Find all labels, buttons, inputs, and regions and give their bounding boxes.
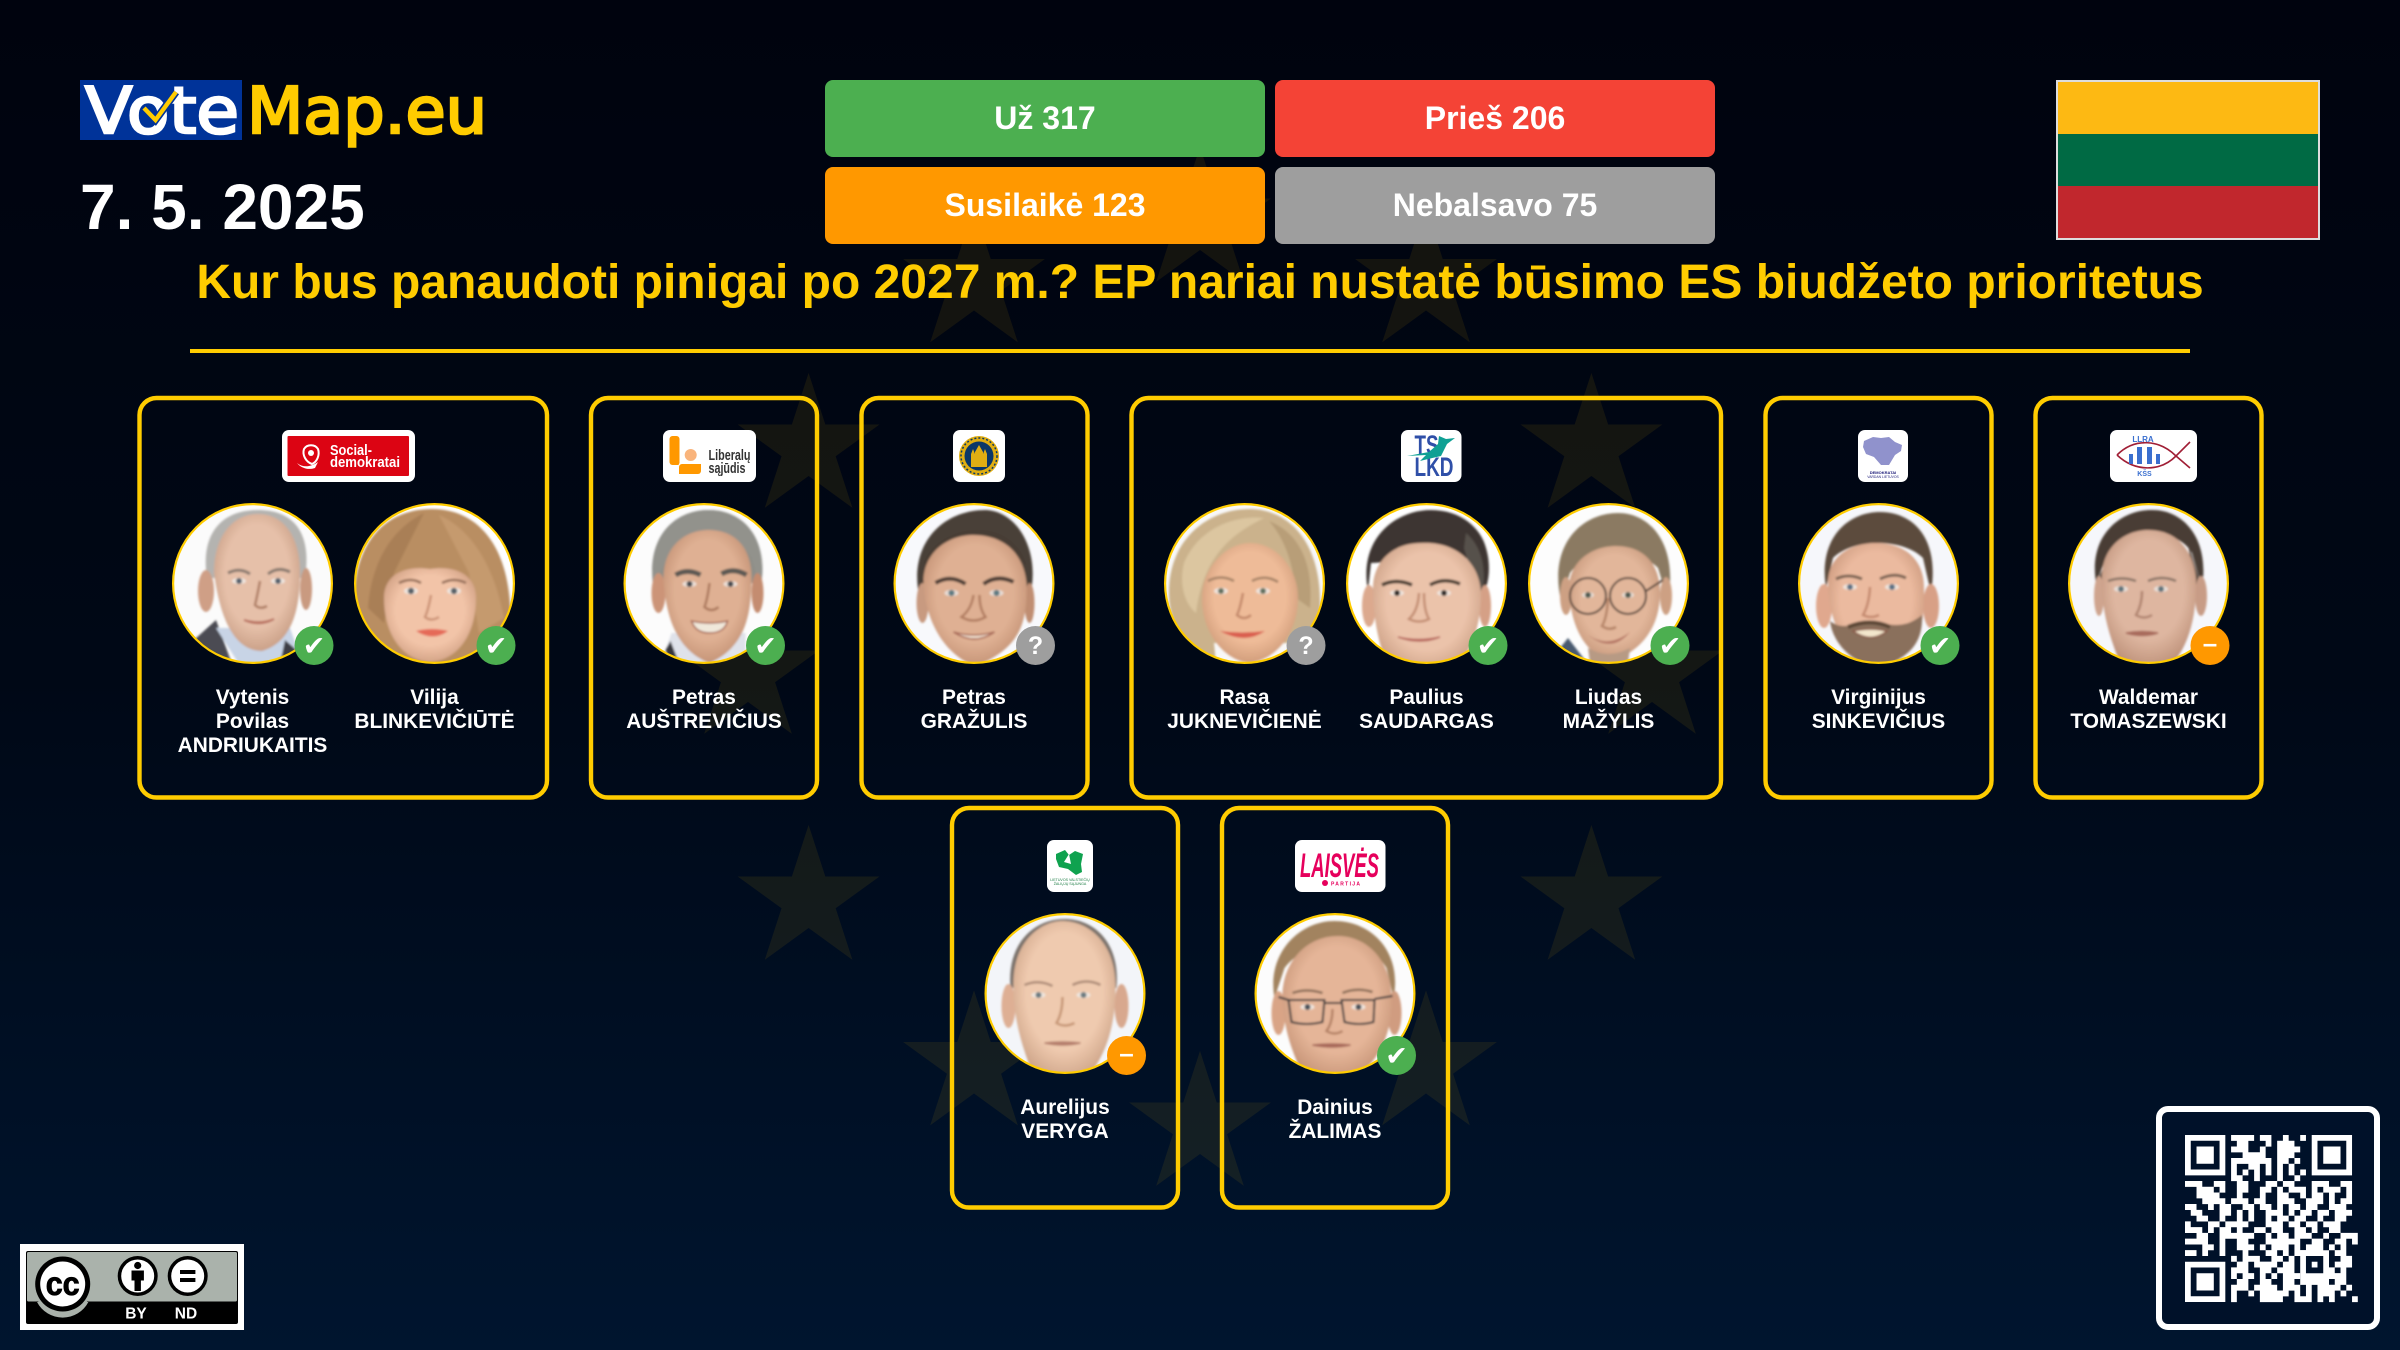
- vote tally buttons: [825, 80, 1715, 244]
- photo: Petras Auštrevičius: [624, 504, 784, 664]
- photo: Virginijus Sinkevičius: [1798, 504, 1958, 668]
- photo: Aurelijus Veryga: [985, 914, 1145, 1078]
- photo: Waldemar Tomaszewski: [2068, 504, 2228, 664]
- party logo: LLRA-KŠS: [2110, 430, 2197, 482]
- name: JUKNEVIČIENĖ: [1167, 709, 1322, 733]
- badge: for: ✔: [1385, 1041, 1408, 1072]
- badge: for: ✔: [1929, 631, 1951, 662]
- party logo: TS-LKD: [1401, 430, 1462, 482]
- name: AUŠTREVIČIUS: [626, 709, 782, 733]
- name: Povilas: [216, 710, 289, 733]
- party logo: Lietuvos valstiečių: [1047, 840, 1093, 892]
- name: BLINKEVIČIŪTĖ: [354, 709, 515, 733]
- badge: for: [1468, 626, 1508, 665]
- badge: for: [476, 626, 516, 665]
- panel: Gražulis party: [862, 398, 1088, 798]
- name: Vytenis: [216, 686, 289, 709]
- badge: abstain: [1107, 1036, 1146, 1075]
- party logo: Demokratai vardan Lietuvos: VARDAN LIETUVOS: [1867, 475, 1900, 479]
- badge: not voted: [1016, 626, 1055, 665]
- party logo: TS-LKD: LKD: [1414, 452, 1454, 482]
- button: did not vote: [1275, 167, 1715, 244]
- button: did not vote: Nebalsavo 75: [1393, 187, 1597, 223]
- name: ANDRIUKAITIS: [178, 734, 327, 757]
- licence badge: CC BY-ND: [20, 1244, 244, 1330]
- party logo: Liberalų sąjūdis: sąjūdis: [708, 460, 746, 477]
- photo: Liudas Mažylis: [1528, 504, 1688, 664]
- badge: abstain: –: [2203, 628, 2217, 658]
- badge: for: ✔: [485, 631, 507, 662]
- name: Petras: [942, 686, 1006, 709]
- name: Rasa: [1220, 686, 1270, 709]
- name: Vilija: [410, 686, 459, 709]
- photo: Paulius Saudargas: [1346, 504, 1506, 673]
- party logo: emblem: [953, 430, 1005, 482]
- badge: for: ✔: [754, 631, 777, 662]
- badge: for: [1920, 626, 1960, 665]
- party logo: Laisvės partija: [1295, 840, 1386, 892]
- name: ŽALIMAS: [1289, 1119, 1381, 1143]
- name: Dainius: [1297, 1096, 1373, 1119]
- button: abstain: Susilaikė 123: [944, 187, 1146, 223]
- badge: abstain: [2190, 626, 2230, 665]
- photo: Vilija Blinkevičiūtė: [354, 504, 514, 664]
- panel: Liberalų sąjūdis: [591, 398, 817, 798]
- badge: not voted: [1286, 626, 1326, 665]
- name: SINKEVIČIUS: [1812, 709, 1945, 733]
- flag: Lithuania: [2056, 80, 2320, 240]
- badge: not voted: ?: [1298, 632, 1314, 660]
- photo: Vytenis Povilas Andriukaitis: [172, 504, 332, 664]
- logo: VoteMap.eu: Vote: [85, 75, 239, 149]
- title rule: [190, 349, 2190, 353]
- logo: VoteMap.eu: Map.eu: [247, 75, 487, 149]
- panel: Valstiečiai: [952, 808, 1178, 1208]
- badge: for: ✔: [1477, 631, 1499, 662]
- name: GRAŽULIS: [921, 709, 1027, 733]
- badge: for: [294, 626, 334, 665]
- party logo: LLRA-KŠS: KŠS: [2137, 469, 2152, 478]
- photo: Dainius Žalimas: [1255, 914, 1415, 1078]
- photo: Petras Gražulis: [894, 504, 1054, 666]
- party logo: Social-demokratai: demokratai: [330, 454, 400, 471]
- panel: Demokratai: [1766, 398, 1992, 798]
- icon: cc: [34, 1256, 94, 1324]
- icon: cc: cc: [46, 1265, 80, 1302]
- icon: nd: [168, 1256, 208, 1296]
- party logo: Social-demokratai: Social-: [330, 442, 372, 459]
- badge: for: [746, 626, 785, 665]
- badge: for: ✔: [1659, 631, 1681, 662]
- party logo: Demokratai vardan Lietuvos: DEMOKRATAI: [1870, 470, 1896, 475]
- party logo: Demokratai vardan Lietuvos: [1858, 430, 1908, 482]
- name: Virginijus: [1831, 686, 1926, 709]
- button: for: Už 317: [994, 100, 1096, 136]
- party logo: Lietuvos valstiečių: ŽALIŲJŲ SĄJUNGA: [1054, 881, 1087, 886]
- party logo: Lietuvos valstiečių: LIETUVOS VALSTIEČIŲ: [1050, 877, 1090, 882]
- party logo: Laisvės partija: PARTIJA: [1331, 882, 1360, 888]
- title: Kur bus panaudoti pinigai po 2027 m.? EP nariai nustatė būsimo ES biudžeto prioritetus: [196, 256, 2204, 309]
- panel: TS-LKD: [1132, 398, 1721, 798]
- party logo: Liberalų sąjūdis: [663, 430, 756, 482]
- name: VERYGA: [1021, 1120, 1109, 1143]
- badge: for: [1377, 1036, 1416, 1075]
- photo: Rasa Juknevičienė: [1164, 504, 1324, 664]
- name: Waldemar: [2099, 686, 2198, 709]
- name: TOMASZEWSKI: [2070, 710, 2227, 733]
- QR code: [2159, 1109, 2377, 1327]
- party logo: Liberalų sąjūdis: Liberalų: [708, 447, 750, 464]
- licence badge: CC BY-ND: BY: [125, 1306, 147, 1322]
- name: SAUDARGAS: [1359, 710, 1494, 733]
- badge: for: [1650, 626, 1690, 665]
- panel: LLRA-KŠS: [2036, 398, 2262, 798]
- party logo: TS-LKD: TS: [1414, 430, 1438, 460]
- party logo: LLRA-KŠS: LLRA: [2132, 435, 2154, 444]
- name: Paulius: [1389, 686, 1464, 709]
- button: against: Prieš 206: [1425, 100, 1565, 136]
- name: Liudas: [1575, 686, 1642, 709]
- panel: Laisvės partija: [1222, 808, 1448, 1208]
- button: for: [825, 80, 1265, 157]
- badge: for: ✔: [303, 631, 325, 662]
- button: against: [1275, 80, 1715, 157]
- EU star ring: [677, 147, 1723, 1186]
- name: MAŽYLIS: [1563, 709, 1654, 733]
- name: Petras: [672, 686, 736, 709]
- logo: VoteMap.eu: [80, 75, 487, 149]
- badge: abstain: –: [1119, 1038, 1134, 1068]
- licence badge: CC BY-ND: ND: [175, 1306, 197, 1322]
- date: 7. 5. 2025: [80, 171, 365, 243]
- name: Aurelijus: [1020, 1096, 1110, 1119]
- badge: not voted: ?: [1028, 632, 1043, 660]
- button: abstain: [825, 167, 1265, 244]
- panel: Social-demokratai: [140, 398, 547, 798]
- icon: by: [118, 1256, 158, 1296]
- party logo: Social-demokratai: [282, 430, 415, 482]
- party logo: Laisvės partija: LAISVĖS: [1300, 847, 1379, 885]
